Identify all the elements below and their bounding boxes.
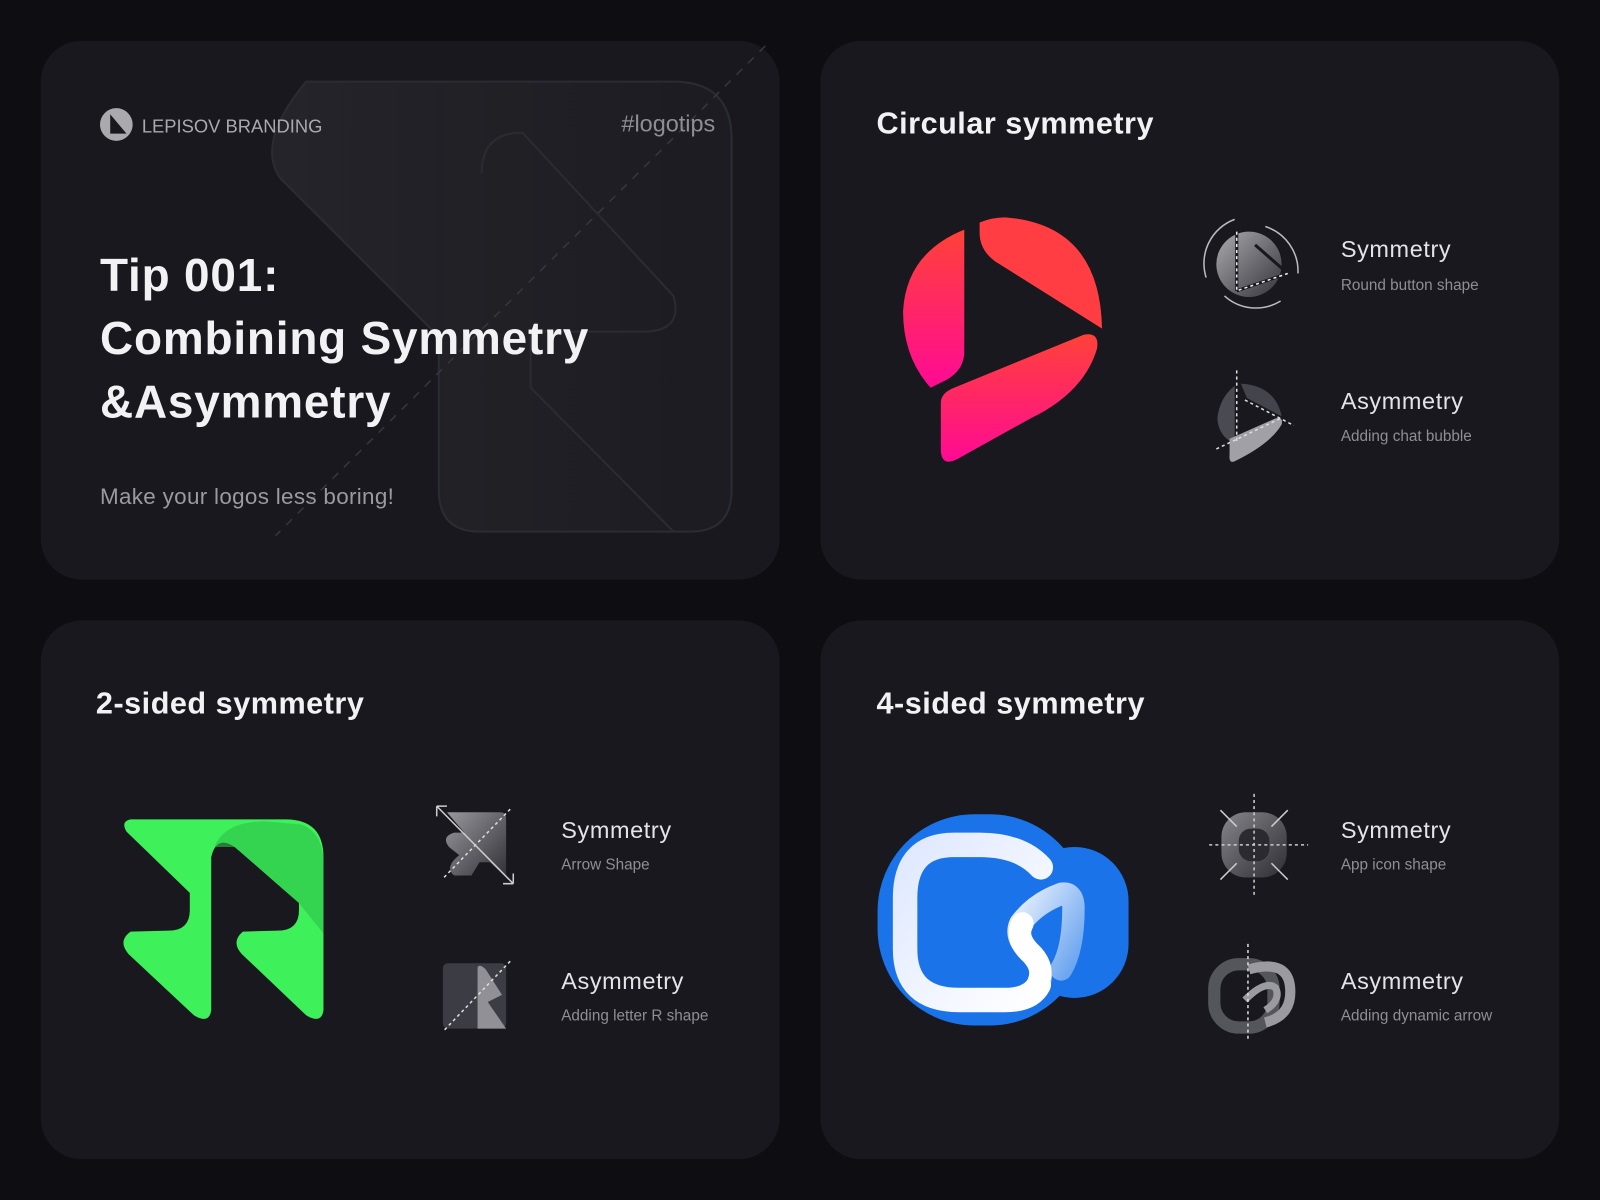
text: asymmetry: Asymmetry xyxy=(1341,388,1464,414)
text: asymmetry: Asymmetry xyxy=(561,968,684,994)
text: symmetry: Symmetry xyxy=(561,817,672,843)
icon: asymmetry chat xyxy=(1216,370,1294,462)
icon: app icon symmetry xyxy=(1209,794,1308,898)
icon: arrow symmetry xyxy=(437,806,513,884)
icon: R asymmetry xyxy=(443,961,510,1031)
heading: 2-sided symmetry xyxy=(96,686,364,720)
text: asymmetry xyxy=(1341,968,1493,1024)
icon: dynamic arrow asymmetry xyxy=(1214,944,1290,1041)
text: symmetry: App icon shape xyxy=(1341,856,1446,873)
icon: blue logo xyxy=(878,814,1129,1026)
title: &Asymmetry xyxy=(100,375,391,427)
text: asymmetry xyxy=(1341,388,1472,445)
icon: symmetry rotation xyxy=(1204,219,1298,308)
text: symmetry xyxy=(1341,236,1479,294)
text: symmetry: Symmetry xyxy=(1341,236,1451,262)
panel: 2-sided symmetry xyxy=(41,620,780,1159)
text: symmetry: Round button shape xyxy=(1341,277,1479,294)
subtitle: Make your logos less boring! xyxy=(100,484,394,509)
panel: intro xyxy=(41,41,780,580)
text: asymmetry: Asymmetry xyxy=(1341,968,1464,994)
title: Tip 001: xyxy=(100,249,279,301)
icon: pink play bubble logo xyxy=(903,217,1102,462)
heading: 4-sided symmetry xyxy=(877,686,1145,720)
panel: 4-sided symmetry xyxy=(820,620,1559,1159)
panel: circular symmetry xyxy=(820,41,1559,580)
decorative background R shape xyxy=(272,46,765,536)
text: asymmetry: Adding dynamic arrow xyxy=(1341,1007,1493,1024)
text: asymmetry xyxy=(561,968,708,1024)
text: symmetry xyxy=(1341,817,1451,873)
text: symmetry xyxy=(561,817,672,873)
icon: green R logo xyxy=(123,819,323,1019)
text: symmetry: Symmetry xyxy=(1341,817,1451,843)
text: asymmetry: Adding chat bubble xyxy=(1341,428,1472,445)
brand logo xyxy=(100,108,322,141)
title: Combining Symmetry xyxy=(100,312,589,364)
text: asymmetry: Adding letter R shape xyxy=(561,1007,708,1024)
brand logo: LEPISOV BRANDING xyxy=(142,116,322,137)
hashtag: #logotips xyxy=(621,111,715,137)
text: symmetry: Arrow Shape xyxy=(561,856,650,873)
heading: Circular symmetry xyxy=(877,107,1154,141)
